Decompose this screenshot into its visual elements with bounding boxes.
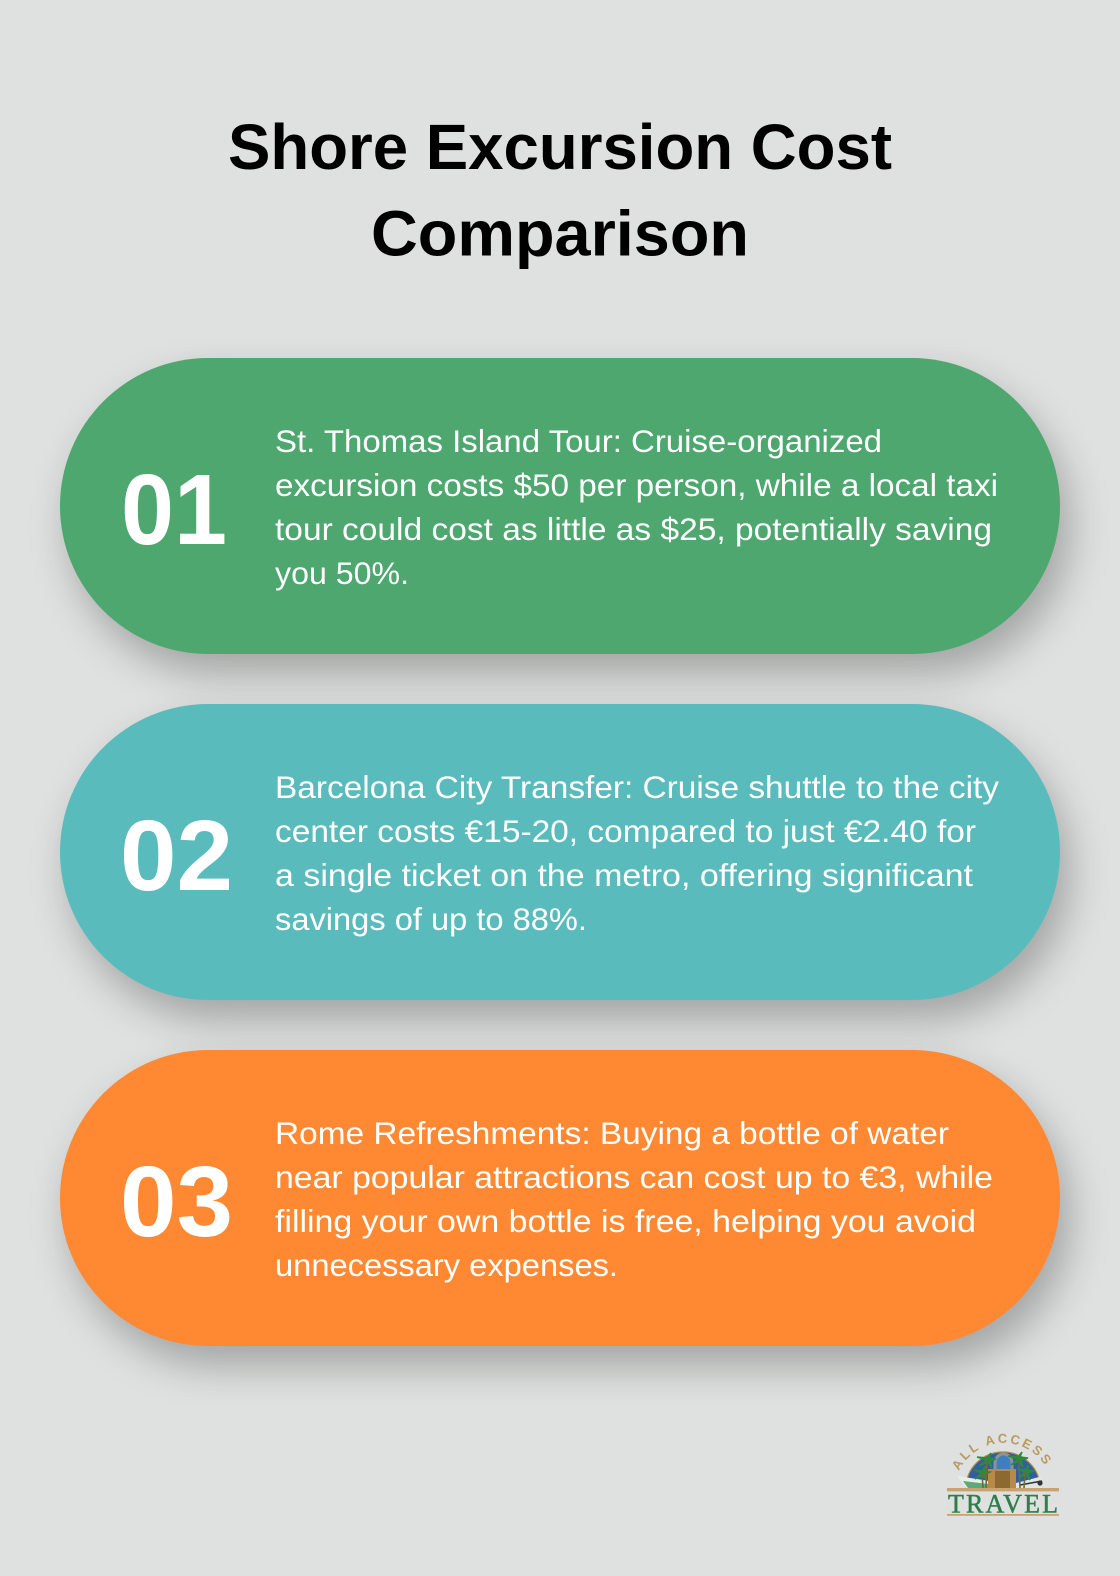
text: Rome Refreshments: filling your own bottle is free, helping you avoid	[275, 1203, 976, 1239]
text: Barcelona City Transfer	[275, 769, 999, 937]
icon: All Access Travel logo	[947, 1434, 1059, 1518]
title: Shore Excursion Cost	[228, 111, 892, 183]
text: St. Thomas Island Tour: tour could cost as little as $25, potentially saving	[275, 511, 992, 547]
text: St. Thomas Island Tour: excursion costs $50 per person, while a local taxi	[275, 467, 998, 503]
text: St. Thomas Island Tour: St. Thomas Island Tour: Cruise-organized	[275, 423, 882, 459]
text: Barcelona City Transfer: Barcelona City Transfer: Cruise shuttle to the city	[275, 769, 999, 805]
title: Comparison	[371, 198, 749, 270]
number 02: 02	[120, 800, 233, 912]
icon: All Access Travel logo: TRAVEL	[948, 1490, 1058, 1518]
text: Rome Refreshments: Rome Refreshments: Buying a bottle of water	[275, 1115, 949, 1151]
text: Barcelona City Transfer: a single ticket on the metro, offering significant	[275, 857, 973, 893]
text: Barcelona City Transfer: savings of up to 88%.	[275, 901, 587, 937]
text: St. Thomas Island Tour	[275, 423, 998, 591]
panel: St. Thomas Island Tour	[60, 358, 1060, 654]
panel: Barcelona City Transfer	[60, 704, 1060, 1000]
title	[228, 111, 892, 270]
text: Rome Refreshments	[275, 1115, 993, 1283]
icon: All Access Travel logo: ALL ACCESS	[953, 1434, 1051, 1470]
text: Rome Refreshments: near popular attractions can cost up to €3, while	[275, 1159, 993, 1195]
text: St. Thomas Island Tour: you 50%.	[275, 555, 409, 591]
text: Rome Refreshments: unnecessary expenses.	[275, 1247, 618, 1283]
number 01: 01	[121, 454, 227, 566]
number 03: 03	[120, 1146, 233, 1258]
panel: Rome Refreshments	[60, 1050, 1060, 1346]
text: Barcelona City Transfer: center costs €15-20, compared to just €2.40 for	[275, 813, 976, 849]
